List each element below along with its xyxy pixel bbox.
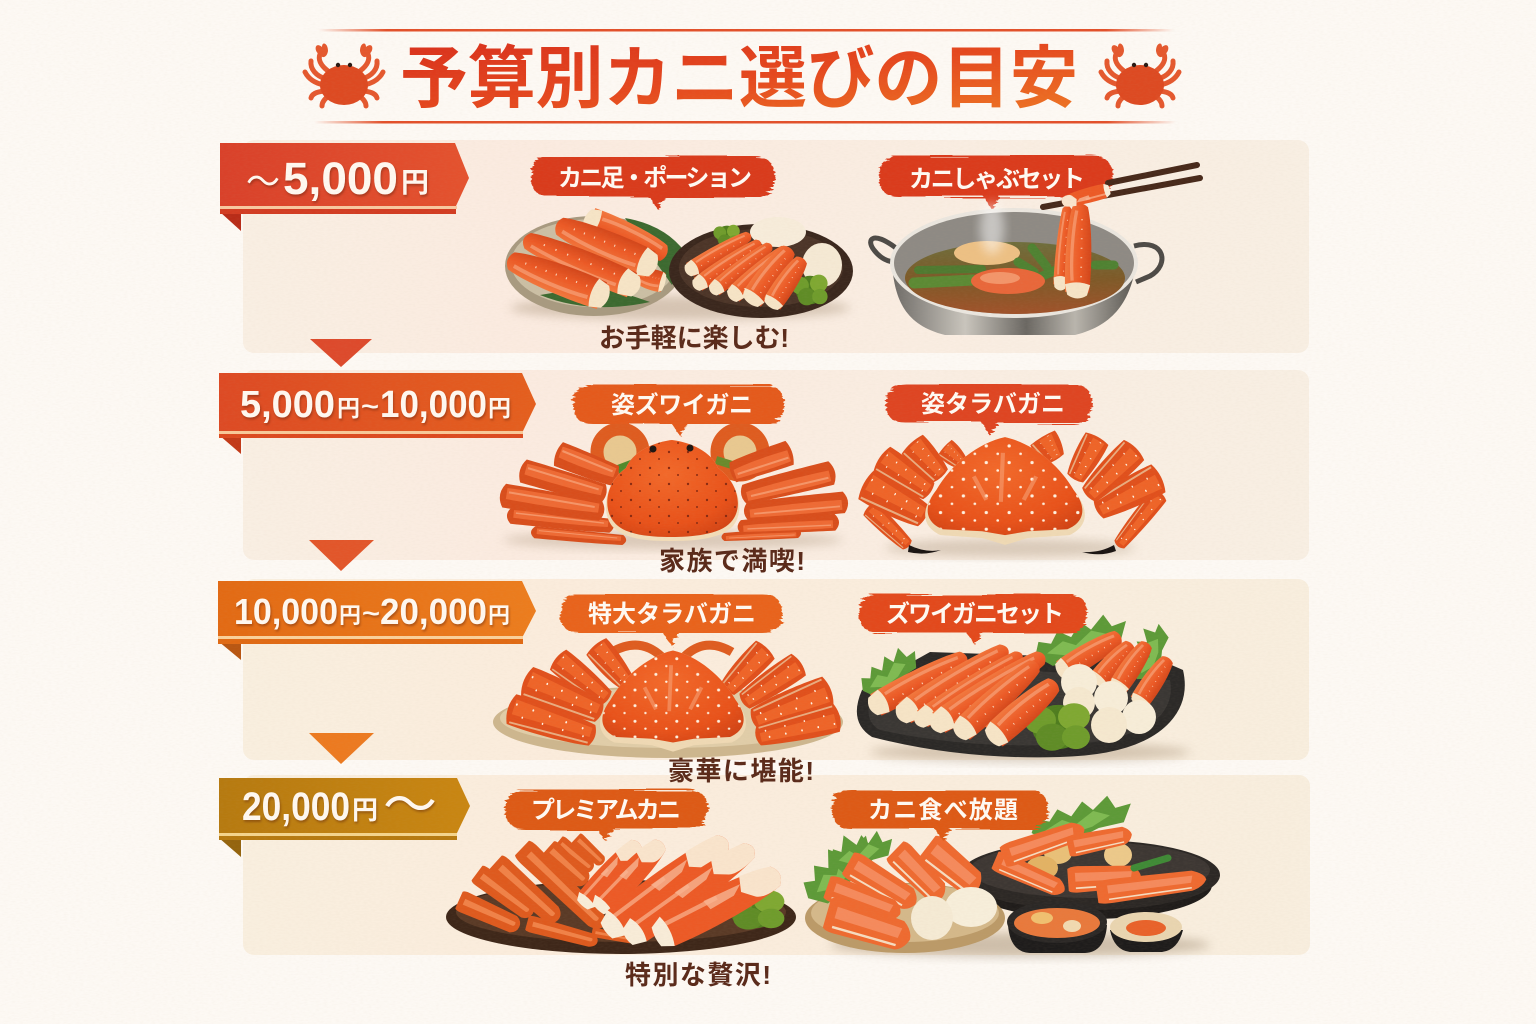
ribbon: price up to 5,000 yen: 〜 (246, 161, 280, 202)
bubble: premium crab (505, 790, 708, 841)
dish: king crab on round plate (493, 636, 843, 758)
bubble: whole king crab (886, 384, 1092, 436)
dish: premium crab on dark plate (446, 827, 796, 954)
bubble: all-you-can-eat crab (832, 790, 1048, 841)
caption: luxury: 豪華に堪能! (668, 756, 814, 786)
panel 1 background (243, 140, 1309, 353)
title text: 予算別カニ選びの目安 (400, 41, 1078, 117)
title top rule (318, 29, 1174, 32)
ribbon: price 5,000 to 10,000 yen: ~ (361, 391, 379, 421)
ribbon: price 10,000 to 20,000 yen: 円 (339, 603, 361, 628)
panel: 20,000 yen and up (219, 775, 1310, 957)
bubble: premium crab: プレミアムカニ (531, 797, 681, 824)
bubble: whole snow crab: 姿ズワイガニ (611, 391, 753, 419)
bubble: crab leg portions (531, 157, 775, 210)
ribbon: price 10,000 to 20,000 yen: ~ (362, 598, 380, 628)
ribbon: price 10,000 to 20,000 yen: 20,000 (380, 591, 487, 632)
ribbon: price 20,000 yen and up (219, 777, 470, 857)
ribbon: price 5,000 to 10,000 yen: 円 (337, 395, 360, 421)
caption: special luxury: 特別な贅沢! (625, 960, 771, 990)
ribbon: price 5,000 to 10,000 yen: 5,000 (240, 384, 335, 426)
ribbon: price 5,000 to 10,000 yen (219, 373, 536, 454)
ribbon: price 10,000 to 20,000 yen: 10,000 (234, 591, 338, 632)
arrow: down to tier 4 (309, 733, 374, 764)
panel: 5,000 to 10,000 yen (219, 370, 1309, 560)
bubble: crab shabu set: カニしゃぶセット (909, 166, 1085, 193)
bubble: snow crab set: ズワイガニセット (886, 600, 1064, 628)
dish: whole king crab (856, 429, 1168, 557)
caption: family feast: 家族で満喫! (659, 546, 805, 576)
ribbon: price 20,000 yen and up: 20,000 (242, 785, 350, 829)
bubble: extra-large king crab: 特大タラバガニ (588, 601, 756, 628)
ribbon: price 10,000 to 20,000 yen: 円 (488, 603, 510, 628)
bubble: whole king crab: 姿タラバガニ (921, 391, 1065, 418)
dish: crab shabu pot with chopsticks (871, 165, 1200, 335)
ribbon: price 5,000 to 10,000 yen: 円 (488, 395, 511, 421)
bubble: extra-large king crab (560, 594, 782, 645)
panel: 10,000 to 20,000 yen (218, 579, 1309, 762)
bubble: all-you-can-eat crab: カニ食べ放題 (868, 797, 1018, 824)
ribbon: price 5,000 to 10,000 yen: 10,000 (380, 384, 487, 426)
dish: snow crab set on dark plate (853, 610, 1190, 762)
dish: whole snow crab (498, 429, 849, 549)
caption: easy enjoyment: お手軽に楽しむ! (599, 323, 789, 353)
ribbon: price up to 5,000 yen: 円 (401, 167, 429, 198)
title bottom rule (314, 121, 1176, 124)
panel 3 background (243, 579, 1309, 760)
panel 2 background (243, 370, 1309, 560)
icon: left crab (305, 44, 383, 106)
ribbon: price 20,000 yen and up: 〜 (383, 777, 437, 835)
bubble: crab shabu set (879, 156, 1113, 210)
panel: up to 5,000 yen (220, 140, 1309, 353)
dish: all-you-can-eat spread (790, 793, 1220, 957)
dish: two plates of crab legs (502, 205, 853, 320)
captions (599, 323, 814, 990)
ribbon: price up to 5,000 yen: 5,000 (283, 153, 398, 204)
arrow: down to tier 2 (310, 339, 372, 367)
icon: right crab (1101, 44, 1179, 106)
bubble: whole snow crab (573, 385, 784, 436)
ribbon: price up to 5,000 yen (220, 143, 469, 231)
ribbon: price 10,000 to 20,000 yen (218, 581, 536, 660)
bubble: crab leg portions: カニ足・ポーション (558, 165, 752, 192)
title block (305, 29, 1179, 124)
arrow: down to tier 3 (309, 540, 374, 571)
panel 4 background (243, 775, 1310, 955)
ribbon: price 20,000 yen and up: 円 (352, 795, 378, 825)
bubble: snow crab set (859, 594, 1087, 645)
